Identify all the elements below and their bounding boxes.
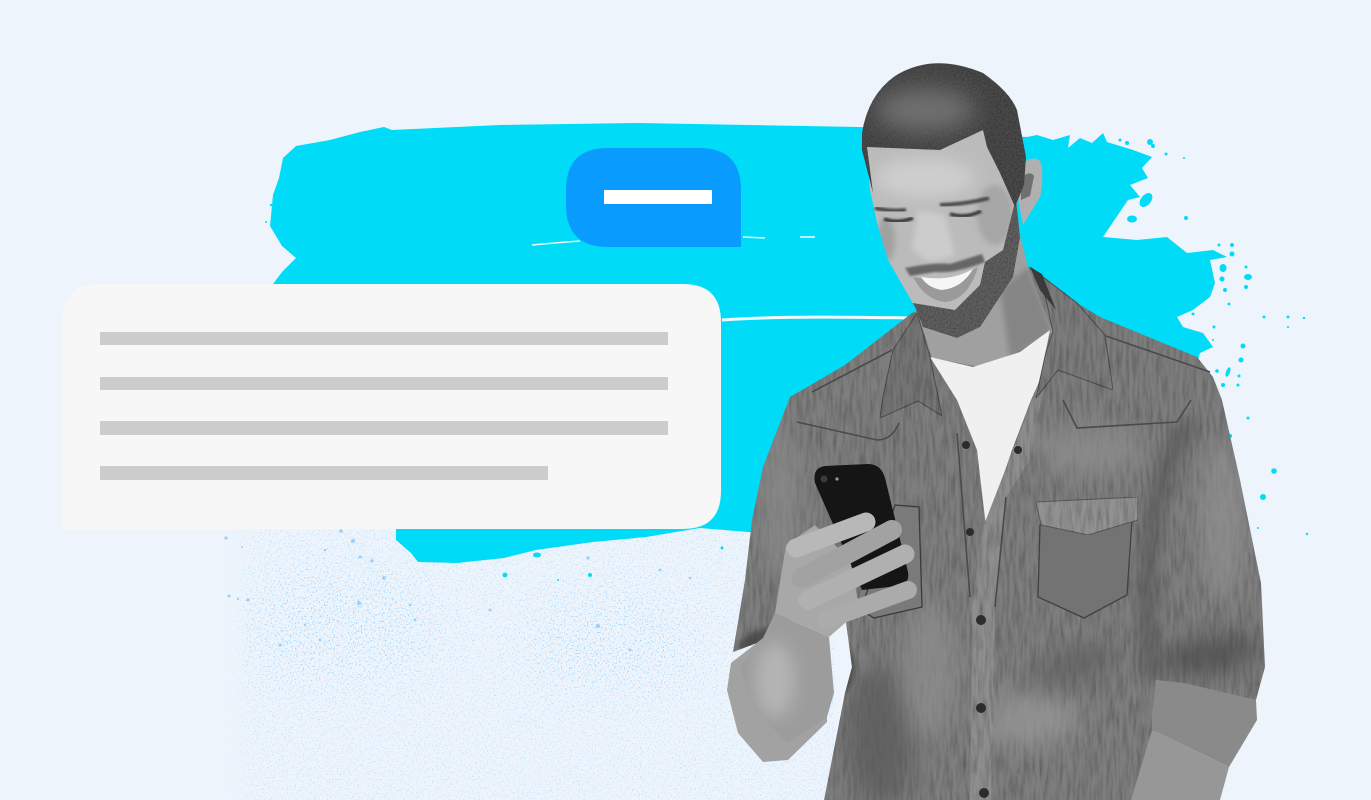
nose highlight	[912, 210, 955, 262]
ear inner shadow	[1021, 173, 1034, 200]
paint splatter dots	[265, 138, 1308, 581]
t-shirt	[930, 330, 1050, 527]
reply text line	[604, 190, 712, 204]
left forearm	[758, 613, 834, 717]
forehead highlight	[875, 158, 975, 198]
collar dark inner	[1030, 267, 1056, 310]
message text line 3	[100, 421, 668, 435]
shoulder seams	[797, 336, 1210, 607]
left cheek shadow	[877, 218, 895, 262]
ear	[1015, 159, 1042, 225]
left eye	[884, 218, 913, 221]
right forearm	[1131, 730, 1229, 800]
speckled spray texture	[215, 530, 835, 800]
message text line 2	[100, 377, 668, 390]
beard	[912, 198, 1024, 340]
message text line 4	[100, 466, 548, 480]
button placket	[970, 372, 1046, 800]
lower lip shadow	[913, 267, 978, 302]
message text line 1	[100, 332, 668, 345]
phone	[814, 464, 908, 590]
right eye	[950, 211, 981, 216]
blue reply bubble	[566, 148, 741, 247]
cyan brush stroke	[270, 123, 1227, 563]
left cuff	[727, 638, 827, 762]
hand	[775, 522, 908, 637]
man with phone	[720, 55, 1280, 800]
left eyebrow	[875, 208, 906, 211]
jacket buttons	[962, 441, 1022, 798]
jacket	[720, 260, 1280, 800]
chest pocket	[1036, 497, 1138, 618]
phone camera	[820, 476, 839, 482]
right cheek shadow	[977, 185, 1013, 245]
teeth	[921, 269, 973, 290]
left collar	[880, 313, 942, 418]
left pocket	[861, 505, 922, 618]
neck shadow	[1000, 267, 1053, 358]
larger spray dots	[224, 529, 691, 652]
hair highlight	[875, 88, 975, 132]
face	[867, 130, 1020, 338]
mustache	[905, 254, 985, 276]
right collar	[1030, 267, 1113, 398]
jacket shading	[735, 420, 1264, 800]
right eyebrow	[940, 198, 989, 205]
right cuff	[1152, 680, 1257, 767]
pocket flap	[1036, 497, 1138, 535]
neck	[915, 235, 1053, 368]
white message bubble	[62, 284, 721, 529]
forearm shading	[755, 642, 795, 718]
hair	[862, 63, 1026, 206]
fingers	[796, 522, 908, 620]
